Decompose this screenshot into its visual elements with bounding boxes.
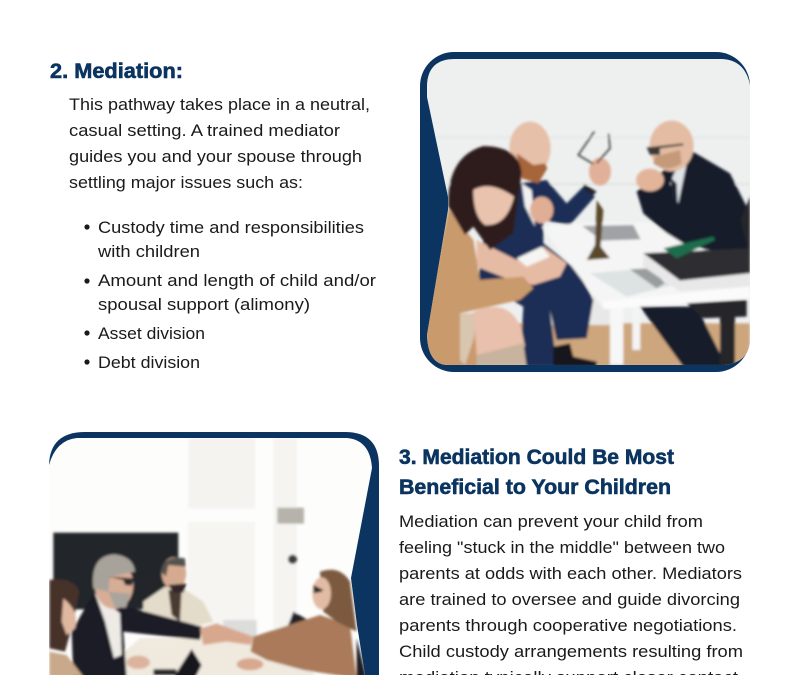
table xyxy=(117,638,317,675)
text block: mediation intro xyxy=(69,95,370,192)
photo panel: couple with mediator xyxy=(410,52,755,372)
text block: mediation intro: settling major issues such as: xyxy=(69,173,303,192)
text block: benefits to children: Mediation can prevent your child from xyxy=(399,512,703,531)
bullet list: issues settled in mediation: Debt division xyxy=(98,353,200,372)
text block: mediation intro: guides you and your spouse through xyxy=(69,147,362,166)
heading: 2. Mediation: 2. Mediation: xyxy=(50,60,183,83)
text block: benefits to children: parents at odds with each other. Mediators xyxy=(399,564,742,583)
laptop and phone xyxy=(175,649,202,675)
bullet list: issues settled in mediation: Asset division xyxy=(98,324,205,343)
grey-haired man xyxy=(72,593,202,675)
text block: mediation intro: This pathway takes place in a neutral, xyxy=(69,95,370,114)
left woman xyxy=(49,579,79,652)
bullet list: issues settled in mediation: Amount and length of child and/or xyxy=(98,271,376,290)
text block: benefits to children: parents through cooperative negotiations. xyxy=(399,616,737,635)
photo panel: handshake at meeting table xyxy=(49,432,384,675)
text block: benefits to children: Child custody arrangements resulting from xyxy=(399,642,743,661)
heading: 3. Mediation benefits children xyxy=(399,446,674,499)
right woman xyxy=(251,615,357,675)
woman xyxy=(477,240,567,285)
text block: benefits to children xyxy=(399,512,743,675)
bullet list: issues settled in mediation xyxy=(84,218,376,372)
text block: benefits to children: are trained to oversee and guide divorcing xyxy=(399,590,740,609)
bullet list: issues settled in mediation: with children xyxy=(97,242,200,261)
bullet list: issues settled in mediation: spousal support (alimony) xyxy=(98,295,310,314)
left man xyxy=(478,180,595,367)
text block: benefits to children: feeling "stuck in the middle" between two xyxy=(399,538,725,557)
handshake xyxy=(200,623,253,645)
back man xyxy=(143,587,213,625)
right man xyxy=(637,150,750,260)
text block: mediation intro: casual setting. A trained mediator xyxy=(69,121,340,140)
bullet list: issues settled in mediation: Custody time and responsibilities xyxy=(98,218,364,237)
statue xyxy=(587,200,610,260)
heading: 3. Mediation benefits children: 3. Mediation Could Be Most xyxy=(399,446,674,469)
heading: 3. Mediation benefits children: Beneficial to Your Children xyxy=(399,476,671,499)
table xyxy=(540,220,705,305)
